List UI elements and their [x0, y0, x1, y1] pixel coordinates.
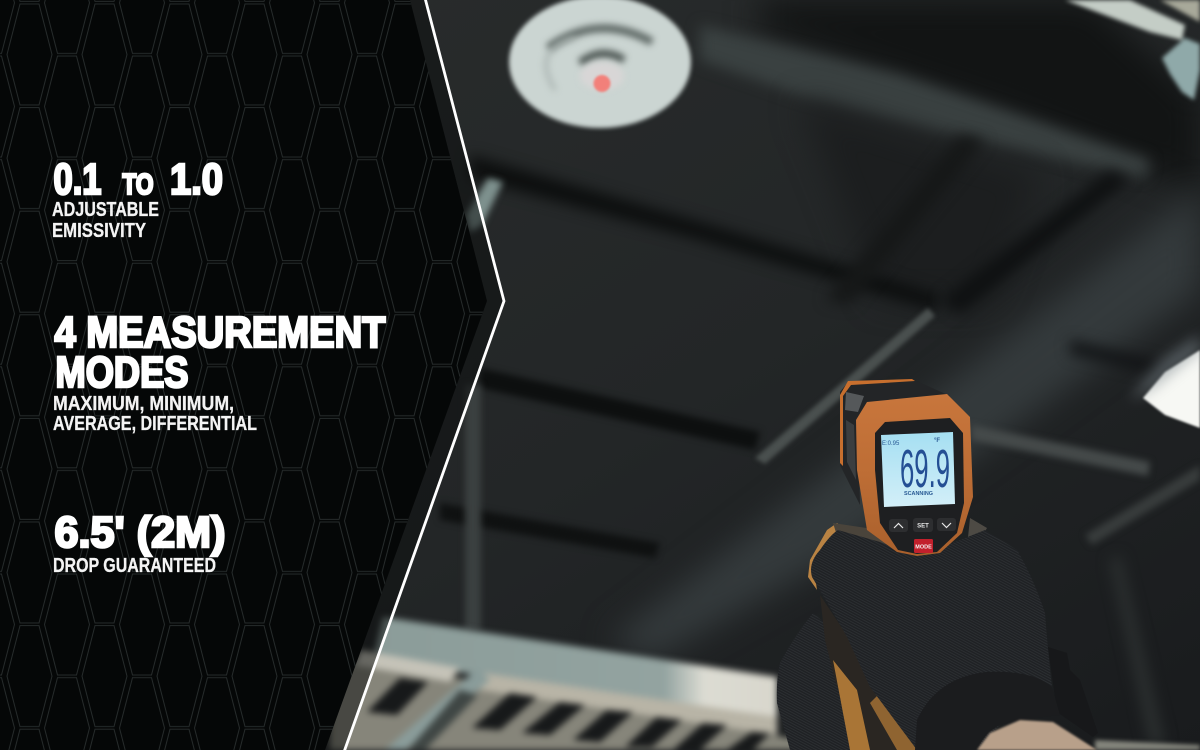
dark upper ceiling shadow — [760, 0, 1200, 190]
black meter face — [875, 418, 964, 554]
infrared thermometer — [840, 379, 973, 556]
dark palm shadow — [820, 595, 920, 750]
emissivity headline: 0.1 — [54, 155, 102, 204]
black chevron panel — [0, 0, 487, 750]
meter buttons — [889, 518, 956, 553]
suspended grid in foreground — [330, 617, 800, 750]
orange rear rim — [840, 379, 915, 466]
tan glove edge — [808, 523, 842, 590]
glove cuff — [915, 672, 1060, 750]
red laser dot — [594, 75, 610, 92]
feature: drop rating — [53, 509, 226, 577]
modes description — [53, 393, 257, 435]
feature: adjustable emissivity — [52, 155, 223, 242]
diagonal pipe far right — [1085, 465, 1200, 545]
LCD screen: °F — [934, 438, 940, 444]
translucent chevron band — [320, 0, 505, 750]
meter body side — [840, 379, 950, 505]
emissivity headline: 1.0 — [170, 155, 223, 204]
meter buttons: MODE — [915, 544, 932, 550]
dark band above the duct — [940, 170, 1130, 315]
white chevron line — [344, 0, 504, 750]
LCD screen — [881, 432, 955, 507]
dark main cross beam — [470, 155, 940, 310]
emissivity headline — [54, 155, 223, 204]
wrist skin — [977, 720, 1097, 750]
LCD screen: SCANNING — [904, 491, 933, 497]
hexagon pattern — [0, 0, 487, 750]
hand in work glove — [777, 518, 1098, 750]
modes description: MAXIMUM, MINIMUM, — [53, 393, 234, 415]
bottom right pale strip — [1095, 740, 1200, 750]
right large duct — [610, 190, 1200, 660]
lower fingers of the glove — [777, 613, 863, 750]
main glove fist — [811, 530, 1057, 750]
drop description: DROP GUARANTEED — [53, 555, 216, 577]
meter buttons: SET — [917, 524, 929, 530]
drop headline: 6.5' (2M) — [54, 509, 226, 557]
vertical grey pipe — [465, 385, 481, 630]
modes headline — [54, 309, 386, 397]
emissivity description: EMISSIVITY — [52, 220, 147, 242]
tan leather palm — [833, 660, 870, 750]
feature: measurement modes — [53, 309, 386, 435]
grey pipe by the meter — [755, 308, 935, 464]
dark underside of the beam — [800, 100, 1040, 300]
modes headline: MODES — [56, 349, 188, 397]
tan thumb strip — [870, 693, 917, 750]
modes headline: 4 MEASUREMENT — [54, 309, 386, 357]
top right white bracket — [1065, 0, 1200, 100]
grip texture on side — [845, 392, 864, 412]
stitched grey patches — [833, 523, 900, 552]
dark diagonal ceiling bars — [825, 135, 985, 305]
emissivity headline: TO — [122, 169, 154, 201]
upper lighter beam — [700, 25, 1150, 178]
small light blob — [466, 178, 503, 232]
modes description: AVERAGE, DIFFERENTIAL — [53, 413, 257, 435]
overhead light fixture right — [1143, 350, 1200, 428]
LCD screen: E:0.95 — [882, 441, 900, 447]
ceiling air diffuser — [509, 0, 691, 128]
emissivity description: ADJUSTABLE — [52, 199, 159, 221]
LCD screen: 69.9 — [900, 439, 950, 499]
emissivity description — [52, 199, 159, 242]
strap at wrist — [1048, 647, 1098, 737]
orange bezel — [856, 394, 973, 556]
grey pipe right of the meter — [972, 425, 1150, 476]
